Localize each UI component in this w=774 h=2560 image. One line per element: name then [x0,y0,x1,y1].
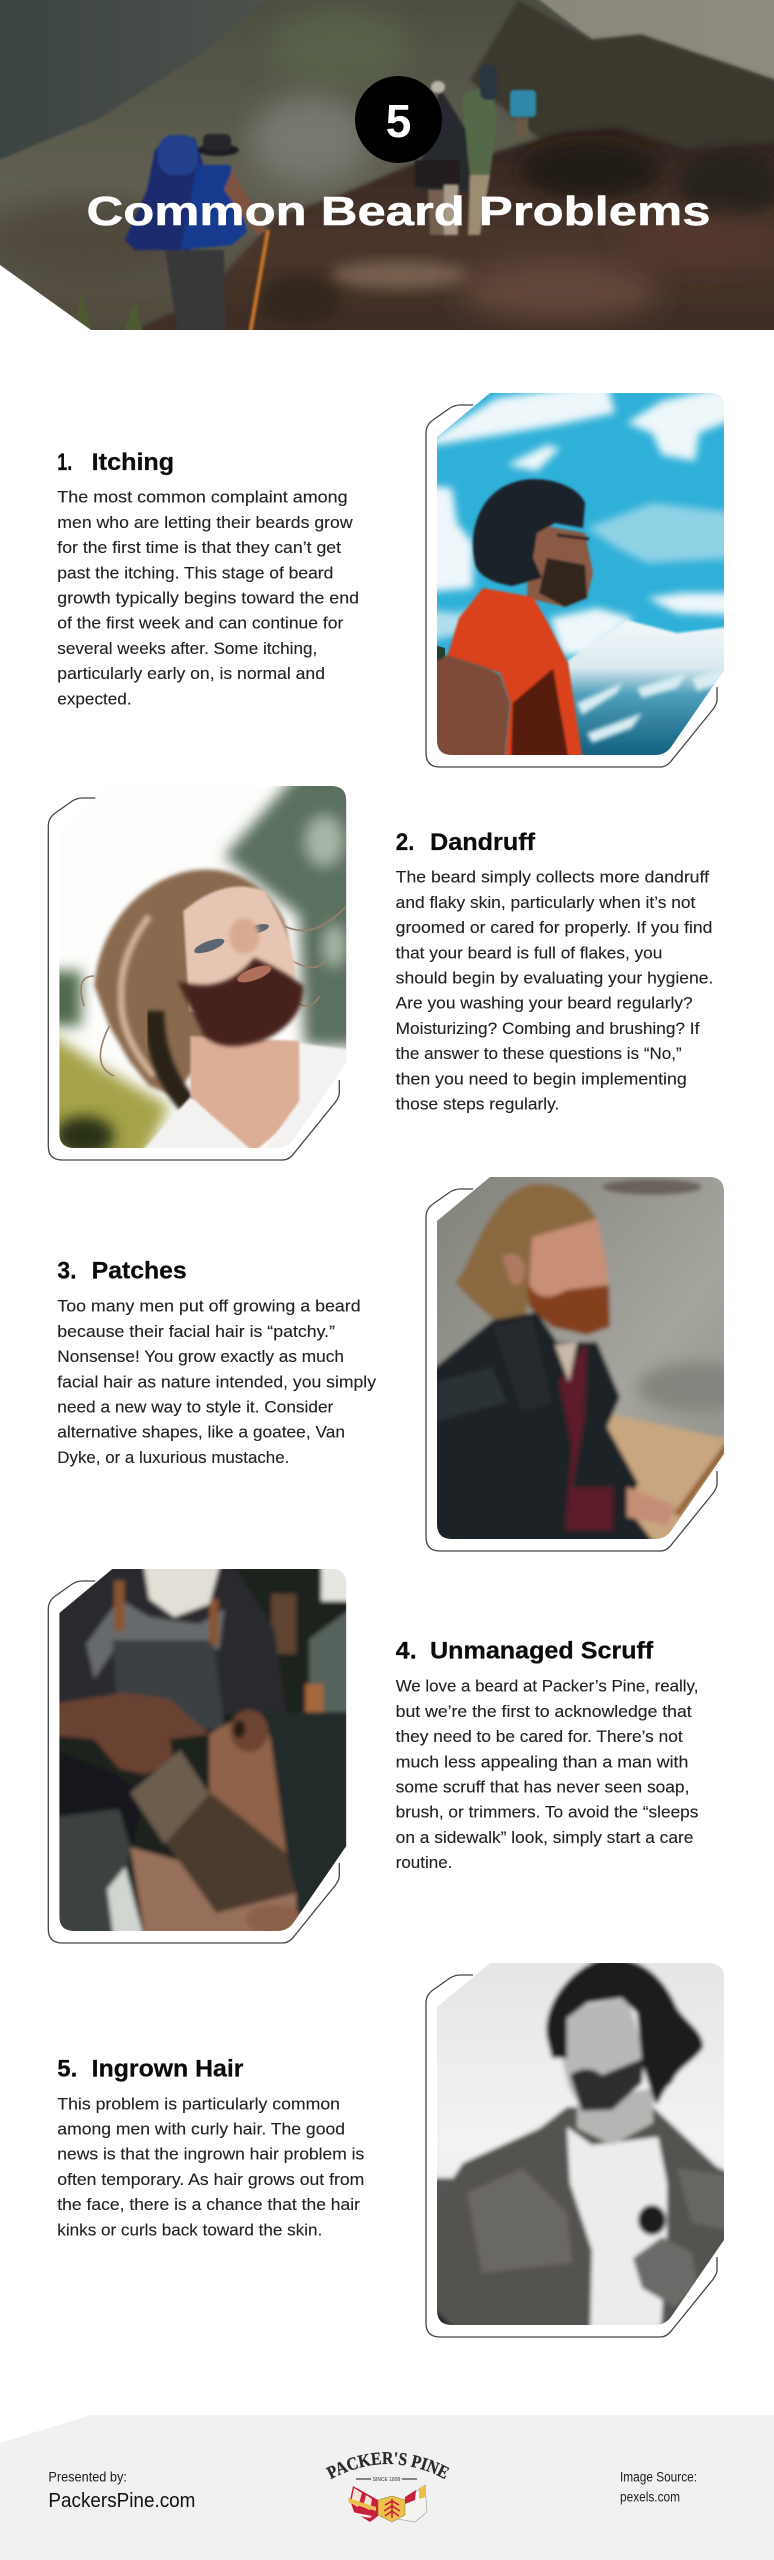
body text: Patches: alternative shapes, like a goatee, Van [57,1423,345,1442]
man's face [562,1998,645,2110]
body text: Ingrown Hair: often temporary. As hair grows out from [57,2170,364,2189]
panel: photo 5, man in denim jacket [425,1963,724,2338]
body text: Unmanaged Scruff: much less appealing than a man with [396,1752,688,1771]
body text: Dandruff: groomed or cared for properly. If you find [396,918,712,937]
logo: Packer's Pine: SINCE 1899 [373,2477,401,2483]
body text: Patches: Too many men put off growing a beard [57,1297,361,1316]
body text: Dandruff: Moisturizing? Combing and brushing? If [396,1019,700,1038]
panel: 1 Itching text [57,449,359,708]
panel: photo 3, man in leather jacket [425,1177,724,1552]
header photo background [0,0,774,360]
body text: Itching: past the itching. This stage of beard [57,563,333,582]
heading: Itching: 1. [57,449,72,476]
panel: photo 1, man in red shirt with mountains [425,393,724,768]
man's hair [546,1958,703,2104]
body text: Unmanaged Scruff: they need to be cared for. There’s not [396,1727,683,1746]
body text: Patches: facial hair as nature intended, you simply [57,1372,377,1391]
heading: Dandruff: 2. [396,829,414,856]
leather jacket [437,1310,655,1539]
heading: Ingrown Hair: 5. [57,2056,77,2083]
man's beard [527,1280,610,1335]
body text: Dandruff: The beard simply collects more dandruff [396,868,709,887]
man's neck and shirt [188,1034,301,1148]
heading: Dandruff: Dandruff [430,829,536,856]
body text: Patches: because their facial hair is “patchy.” [57,1322,335,1341]
body text: Ingrown Hair: the face, there is a chance that the hair [57,2195,360,2214]
man's curly hair [94,869,288,1096]
body text: Dandruff [396,868,713,1114]
corner cut [0,265,91,330]
heading: Itching [57,449,174,476]
heading: Patches: 3. [57,1257,77,1284]
man's head [473,479,593,607]
panel: 5 Ingrown Hair text [57,2056,364,2239]
client's face [209,1719,287,1859]
footer: presented by [48,2470,195,2512]
man's hair [455,1184,597,1322]
body text: Ingrown Hair: news is that the ingrown hair problem is [57,2145,364,2164]
barber's hand [39,1693,209,1774]
panel: 2 Dandruff text [396,829,713,1114]
client's towel [268,1710,346,1912]
body text: Itching: expected. [57,689,132,708]
logo: Packer's Pine [325,2452,450,2522]
body text: Unmanaged Scruff: on a sidewalk” look, simply start a care [396,1828,693,1847]
man's arm [437,654,511,755]
body text: Itching: for the first time is that they can’t get [57,538,341,557]
client's neck and cape [128,1844,300,1931]
footer: image source: Image Source: [620,2470,697,2485]
wooden bench [606,1412,724,1539]
body text: Unmanaged Scruff: brush, or trimmers. To avoid the “sleeps [396,1803,698,1822]
body text: Patches [57,1297,377,1467]
body text: Itching: of the first week and can continue for [57,614,344,633]
footer: presented by: Presented by: [48,2470,127,2485]
badge: number 5: 5 [386,95,411,147]
body text: Patches: Dyke, or a luxurious mustache. [57,1448,289,1467]
man's neck [577,2088,653,2145]
pin badge [638,2205,666,2235]
footer: image source [620,2470,697,2505]
body text: Dandruff: those steps regularly. [396,1094,559,1114]
denim jacket [437,2104,724,2325]
icon: group of hikers [415,65,536,235]
header: hiking photo banner [0,0,774,360]
badge: number 5 [355,76,442,163]
logo: Packer's Pine: PACKER'S PINE [325,2452,450,2480]
body text: Patches: need a new way to style it. Consider [57,1398,334,1416]
heading: Unmanaged Scruff: Unmanaged Scruff [430,1637,654,1664]
man's face [183,886,296,1031]
barber's apron [112,1640,224,1729]
body text: Dandruff: the answer to these questions is “No,” [396,1044,682,1063]
footer band [0,2415,774,2560]
body text: Itching [57,488,359,708]
footer: presented by: PackersPine.com [48,2489,195,2512]
body text: Ingrown Hair: among men with curly hair. The good [57,2120,345,2138]
barber's shirt [60,1569,286,1716]
title: Common Beard Problems [86,188,710,234]
body text: Ingrown Hair [57,2094,364,2239]
man's beard [177,958,303,1046]
body text: Dandruff: should begin by evaluating your hygiene. [396,968,713,988]
barber's mask [140,1569,224,1620]
man's face [527,1218,610,1299]
panel: photo 4, barber trimming beard [48,1569,346,1944]
panel: photo 2, man with curly hair [48,786,346,1161]
logo crest [348,2485,427,2522]
body text: Itching: several weeks after. Some itching, [57,639,317,658]
body text: Dandruff: Are you washing your beard regularly? [396,994,693,1013]
man's red shirt [447,588,585,775]
panel: 4 Unmanaged Scruff text [396,1637,698,1872]
body text: Ingrown Hair: This problem is particularly common [57,2094,340,2113]
heading: Itching: Itching [92,449,174,476]
client's beard [165,1792,297,1914]
heading: Patches: Patches [92,1257,187,1284]
body text: Unmanaged Scruff [396,1677,698,1872]
heading: Ingrown Hair: Ingrown Hair [92,2056,243,2083]
body text: Patches: Nonsense! You grow exactly as much [57,1347,344,1366]
body text: Dandruff: then you need to begin implementing [396,1069,687,1088]
body text: Itching: growth typically begins toward the end [57,588,359,608]
body text: Unmanaged Scruff: some scruff that has never seen soap, [396,1778,689,1796]
body text: Unmanaged Scruff: routine. [396,1853,452,1872]
body text: Itching: The most common complaint among [57,488,348,507]
body text: Dandruff: that your beard is full of flakes, you [396,943,662,962]
body text: Dandruff: and flaky skin, particularly when it’s not [396,893,696,912]
heading: Unmanaged Scruff: 4. [396,1637,417,1664]
white t-shirt [567,2127,667,2345]
body text: Unmanaged Scruff: We love a beard at Packer’s Pine, really, [396,1677,698,1696]
body text: Ingrown Hair: kinks or curls back toward the skin. [57,2220,322,2239]
panel: 3 Patches text [57,1257,377,1467]
body text: Itching: particularly early on, is normal and [57,664,325,683]
icon: lead hiker [125,134,268,345]
footer: image source: pexels.com [620,2490,680,2505]
body text: Unmanaged Scruff: but we’re the first to acknowledge that [396,1702,692,1721]
hand [633,2237,697,2307]
body text: Itching: men who are letting their beards grow [57,513,353,532]
